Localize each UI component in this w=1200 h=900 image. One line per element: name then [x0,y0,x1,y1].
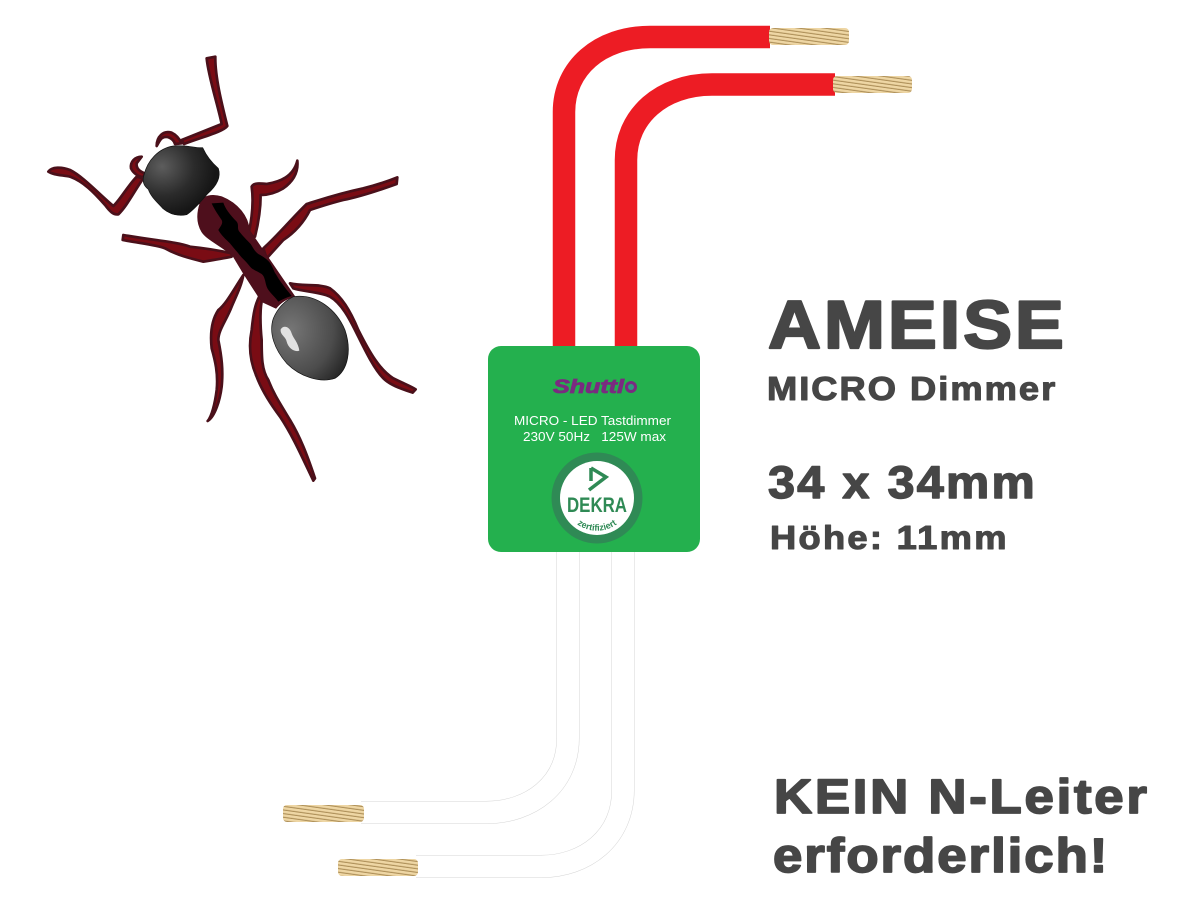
subtitle: MICRO Dimmer [767,371,1055,408]
red wire upper [564,28,849,350]
brand logo [553,377,637,398]
red wire lower [626,76,912,350]
bare copper strands upper [769,28,849,45]
ant thorax [197,195,295,308]
module label line 2: 230V 50Hz 125W max [523,429,667,444]
ant back stripe [212,203,292,302]
height: Höhe: 11mm [770,520,1007,557]
white wire right [338,550,623,876]
dimmer module [488,346,700,552]
DEKRA seal: zertifiziert [577,520,617,531]
dimensions: 34 x 34mm [768,458,1035,508]
bare copper strands right [338,859,418,876]
white wire left [283,550,568,822]
callout line 1: KEIN N-Leiter [774,769,1147,823]
DEKRA seal [552,452,642,544]
module body [488,346,700,552]
ant legs and antennae [48,57,416,481]
DEKRA seal: DEKRA [567,494,627,517]
callout line 2: erforderlich! [773,828,1107,882]
ant abdomen [272,296,348,380]
brand logo: Shuttl [553,377,625,398]
bare copper strands left [283,805,364,822]
bare copper strands lower [833,76,912,93]
ant head [143,146,219,215]
icon: ant [48,57,416,481]
module label line 1: MICRO - LED Tastdimmer [514,413,672,428]
title: AMEISE [768,287,1064,362]
ant abdomen highlight [281,327,299,351]
